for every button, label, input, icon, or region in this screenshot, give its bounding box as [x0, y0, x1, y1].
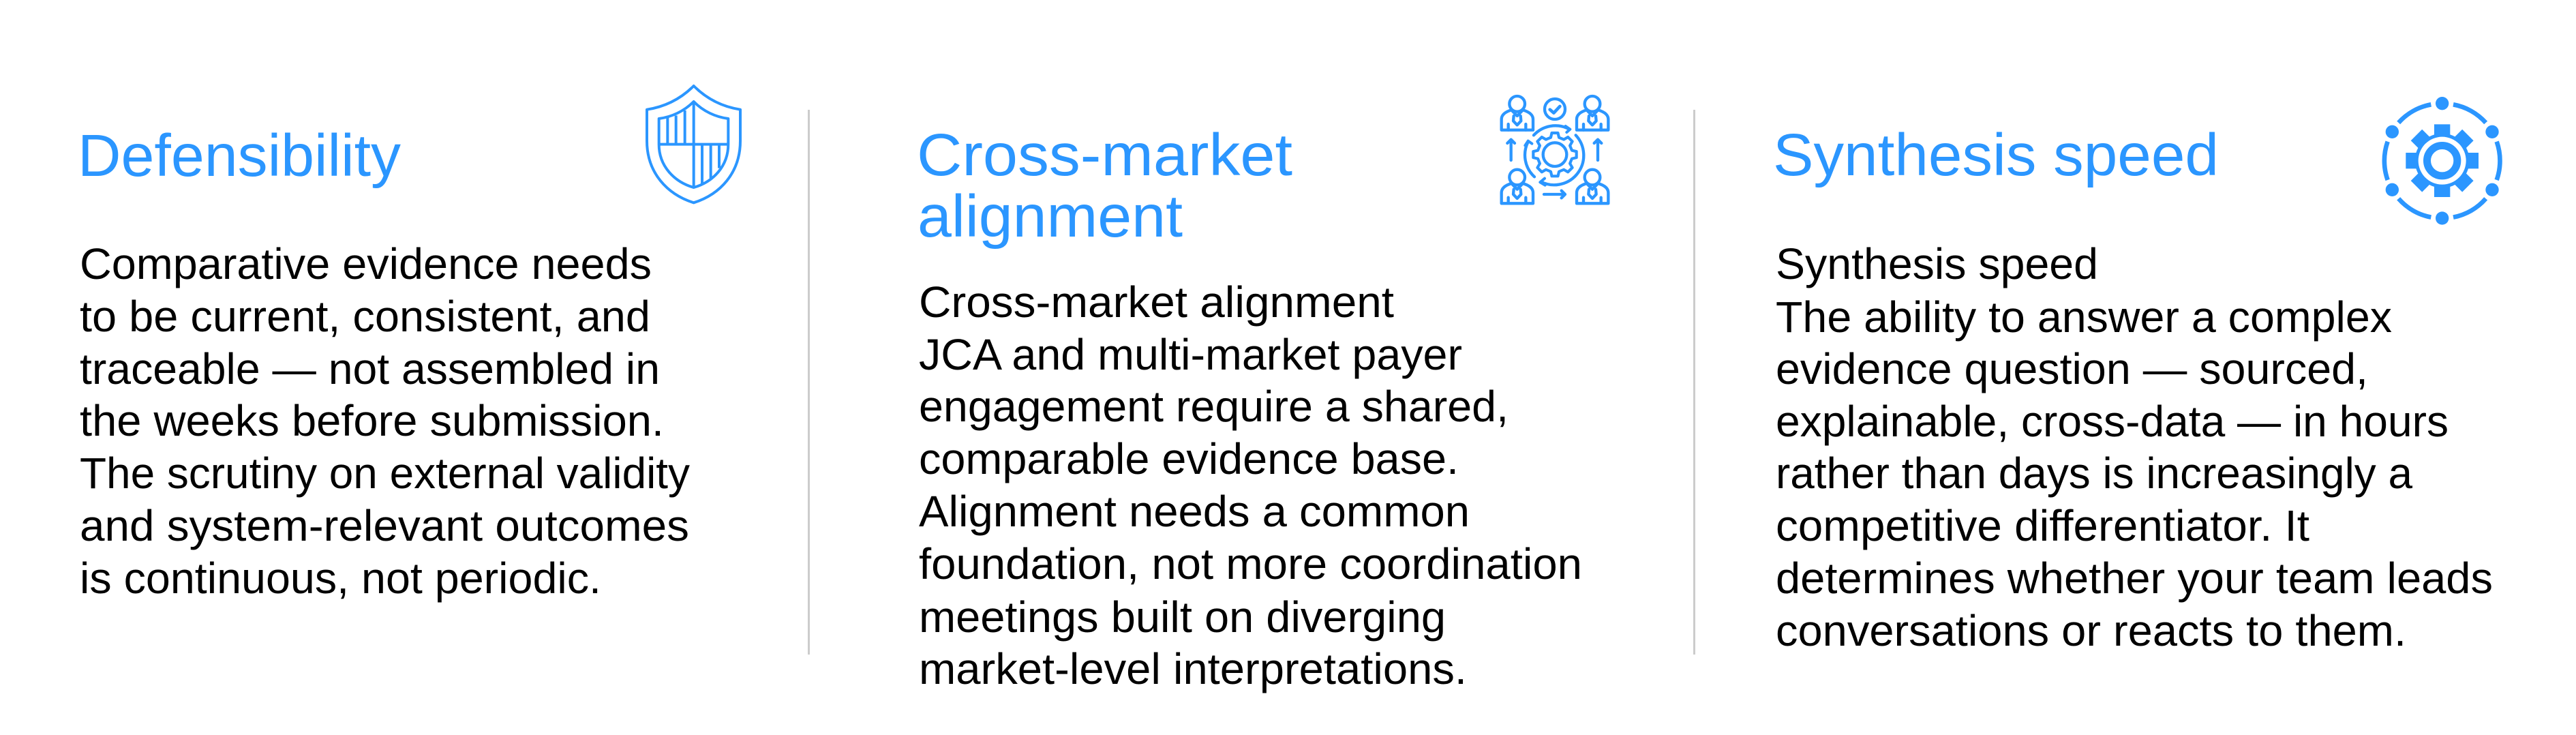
text block: synthesis speed body: determines whether your team leads	[1776, 554, 2493, 603]
heading: Cross-market alignment	[917, 122, 1292, 250]
heading: Synthesis speed: Synthesis speed	[1773, 122, 2219, 188]
icon: shield	[647, 86, 740, 202]
text block: defensibility body: Comparative evidence needs	[80, 239, 652, 288]
text block: defensibility body: to be current, consistent, and	[80, 292, 650, 341]
text block: defensibility body: and system-relevant outcomes	[80, 501, 689, 550]
text block: cross-market body: foundation, not more coordination	[919, 539, 1582, 588]
text block: synthesis speed body: conversations or reacts to them.	[1776, 606, 2406, 655]
text block: cross-market body: Cross-market alignment	[919, 278, 1394, 327]
heading: Cross-market alignment: Cross-market	[917, 122, 1292, 188]
text block: synthesis speed body: explainable, cross-data — in hours	[1776, 397, 2449, 446]
text block: defensibility body: the weeks before submission.	[80, 396, 664, 445]
text block: defensibility body: traceable — not assembled in	[80, 344, 660, 393]
panel: defensibility	[78, 86, 740, 603]
text block: defensibility body: The scrutiny on external validity	[80, 449, 690, 498]
text block: cross-market body: Alignment needs a common	[919, 487, 1470, 536]
text block: synthesis speed body	[1776, 239, 2493, 655]
heading: Defensibility: Defensibility	[78, 123, 401, 189]
icon: team around gear	[1502, 96, 1608, 203]
text block: cross-market body	[919, 278, 1582, 693]
icon: gear in dotted ring	[2384, 97, 2500, 225]
text block: defensibility body	[80, 239, 690, 603]
text block: synthesis speed body: Synthesis speed	[1776, 239, 2098, 288]
text block: synthesis speed body: competitive differentiator. It	[1776, 501, 2309, 550]
text block: synthesis speed body: evidence question — sourced,	[1776, 344, 2368, 393]
text block: synthesis speed body: rather than days is increasingly a	[1776, 449, 2412, 498]
panel: synthesis speed	[1773, 97, 2500, 655]
panel: cross-market alignment	[917, 96, 1608, 693]
text block: synthesis speed body: The ability to answer a complex	[1776, 292, 2392, 342]
text block: cross-market body: engagement require a shared,	[919, 382, 1509, 431]
text block: cross-market body: meetings built on diverging	[919, 592, 1446, 642]
text block: cross-market body: market-level interpretations.	[919, 644, 1467, 693]
text block: cross-market body: JCA and multi-market payer	[919, 330, 1462, 379]
text block: defensibility body: is continuous, not periodic.	[80, 554, 601, 603]
text block: cross-market body: comparable evidence base.	[919, 434, 1459, 483]
heading: Cross-market alignment: alignment	[918, 183, 1183, 250]
